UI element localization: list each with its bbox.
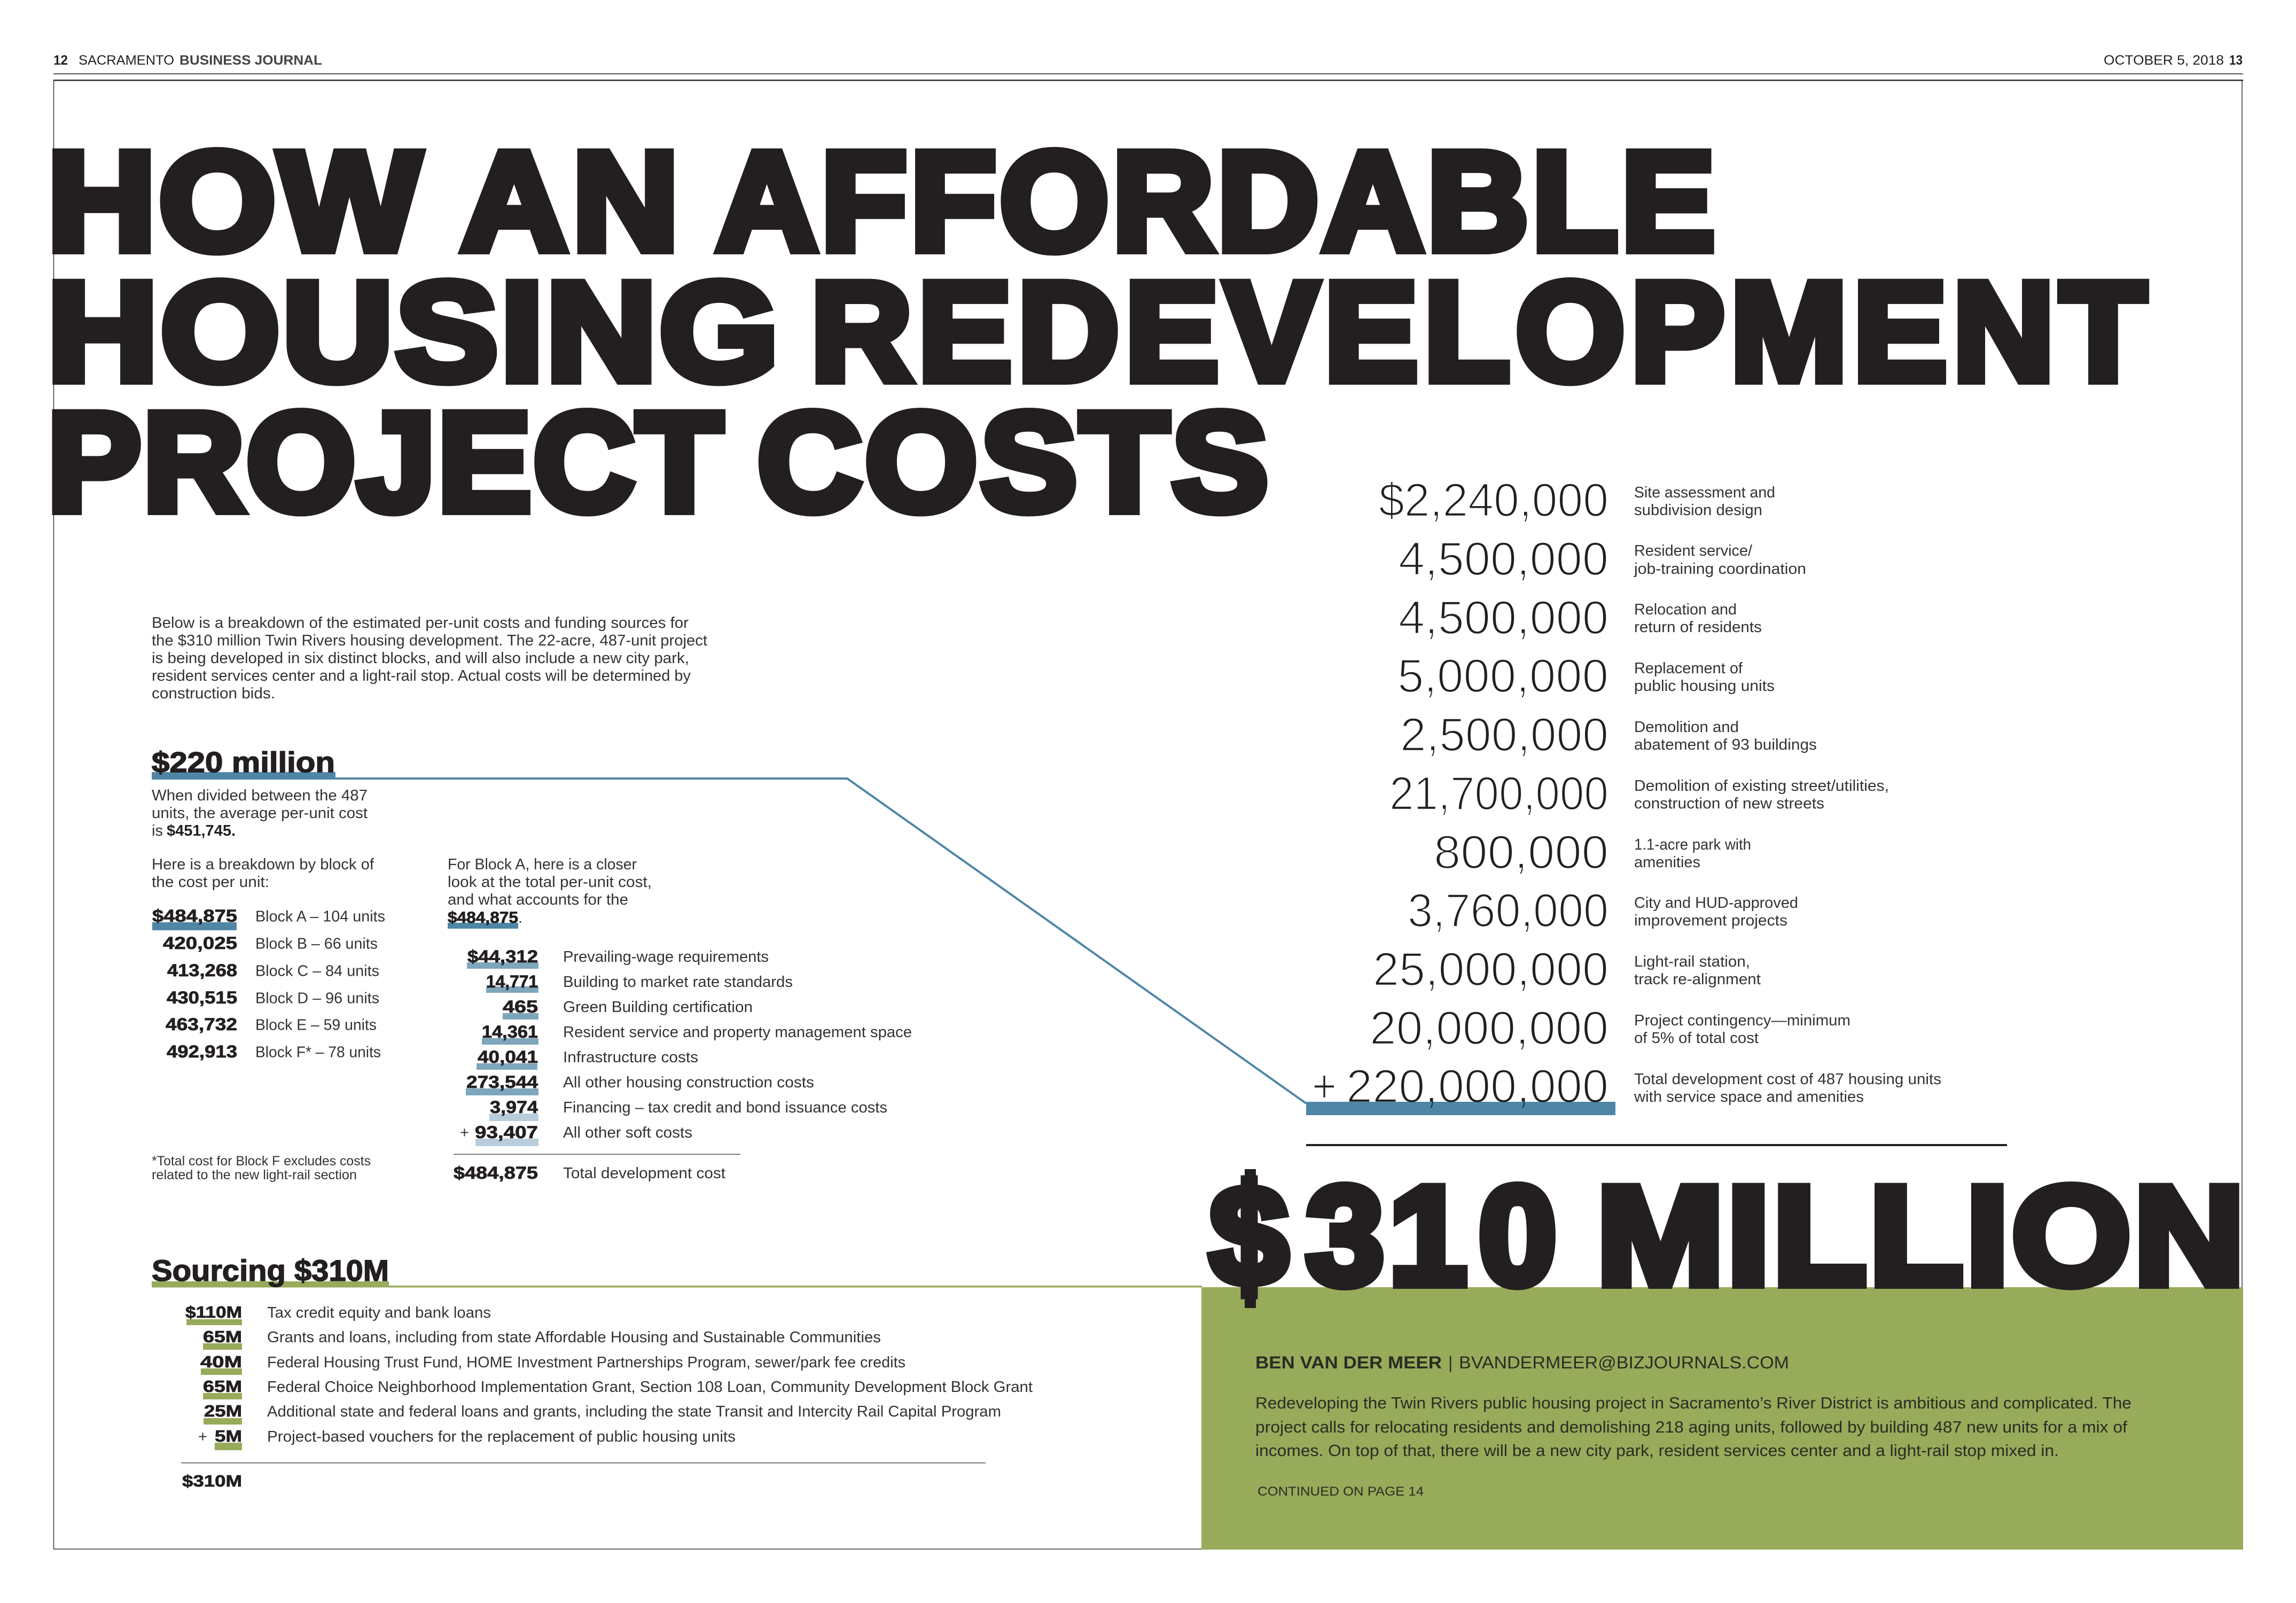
per-unit average text: $451,745.: [167, 822, 236, 839]
cost column labels: public housing units: [1634, 678, 1775, 695]
per-unit average text: units, the average per-unit cost: [152, 805, 368, 822]
title: HOW: [48, 123, 421, 279]
cost column labels: subdivision design: [1634, 502, 1762, 519]
per-unit average text: is: [152, 822, 163, 839]
story text: incomes. On top of that, there will be a new city park, resident services center and a light-rail stop mixed in.: [1255, 1441, 2059, 1460]
cost column labels: with service space and amenities: [1634, 1088, 1864, 1106]
page header: 13: [2229, 53, 2243, 68]
connector line from $220 million to the cost column: [335, 779, 1306, 1103]
cost column labels: Light-rail station,: [1634, 953, 1750, 970]
green panel: [1201, 1287, 2243, 1550]
block cost list: 413,268: [167, 961, 237, 980]
intro text: Below is a breakdown of the estimated per-unit costs and funding sources for: [152, 614, 689, 632]
cost column labels: Replacement of: [1634, 660, 1743, 677]
Block A intro: [448, 856, 652, 929]
heading: Sourcing $310M: Sourcing $310M: [152, 1254, 389, 1287]
funding sources list: $310M: [182, 1472, 242, 1490]
total rule: [1306, 1144, 2007, 1146]
funding sources list: Additional state and federal loans and grants, including the state Transit and Intercity Rail Capital Program: [267, 1403, 1001, 1420]
Block A cost breakdown: +: [460, 1124, 469, 1141]
big total: $310 MILLION: $310: [1210, 1157, 1557, 1314]
block cost list: Block B – 66 units: [255, 935, 378, 952]
per-unit average text: [152, 787, 368, 839]
cost column labels: return of residents: [1634, 619, 1762, 636]
heading: $220 million: $220 million: [152, 746, 335, 779]
continued note: CONTINUED ON PAGE 14: [1258, 1484, 1424, 1499]
Block A cost breakdown: Financing – tax credit and bond issuance costs: [563, 1099, 887, 1116]
Block A cost breakdown: Resident service and property management space: [563, 1024, 912, 1041]
Block A cost breakdown: Green Building certification: [563, 999, 753, 1016]
heading: Sourcing $310M: [152, 1254, 1202, 1288]
story text: Redeveloping the Twin Rivers public housing project in Sacramento’s River District is ambitious and complicated. The: [1255, 1394, 2131, 1412]
cost column labels: improvement projects: [1634, 912, 1787, 929]
intro text: resident services center and a light-rail stop. Actual costs will be determined by: [152, 667, 691, 684]
footnote: *Total cost for Block F excludes costs: [152, 1154, 371, 1169]
Block A cost breakdown: 40,041: [478, 1047, 538, 1067]
intro text: is being developed in six distinct blocks, and will also include a new city park,: [152, 650, 689, 667]
cost column labels: Site assessment and: [1634, 484, 1775, 501]
funding sources list: 40M: [200, 1352, 242, 1371]
funding sources list: [181, 1303, 1033, 1490]
cost column amounts: 20,000,000: [1370, 1001, 1608, 1054]
cost column amounts: 5,000,000: [1397, 649, 1608, 702]
funding sources list: 65M: [203, 1327, 242, 1346]
footnote: related to the new light-rail section: [152, 1168, 357, 1182]
title: AFFORDABLE: [716, 123, 1715, 279]
block cost list: $484,875: [152, 906, 237, 925]
cost column labels: amenities: [1634, 854, 1700, 871]
big total: $310 MILLION: MILLION: [1597, 1158, 2244, 1314]
cost column labels: construction of new streets: [1634, 795, 1824, 812]
page header: SACRAMENTO: [79, 53, 174, 68]
block cost list: Block A – 104 units: [255, 908, 385, 925]
cost column labels: Demolition and: [1634, 719, 1739, 736]
block cost list: 463,732: [166, 1015, 237, 1034]
block cost list: Block F* – 78 units: [255, 1044, 381, 1061]
Block A cost breakdown: 3,974: [490, 1098, 538, 1117]
cost column amounts: 2,500,000: [1400, 708, 1608, 761]
Block A intro: and what accounts for the: [448, 891, 628, 908]
Block A cost breakdown: 93,407: [475, 1123, 538, 1142]
cost column labels: Project contingency—minimum: [1634, 1012, 1850, 1029]
funding sources list: 25M: [204, 1402, 242, 1420]
cost column amounts: 4,500,000: [1399, 532, 1608, 585]
Block A cost breakdown: All other housing construction costs: [563, 1074, 814, 1091]
title: PROJECT: [48, 384, 722, 540]
byline: BEN VAN DER MEER: [1255, 1353, 1442, 1372]
cost column amounts: 4,500,000: [1399, 591, 1608, 644]
cost column labels: job-training coordination: [1634, 561, 1806, 578]
block cost list: 420,025: [163, 933, 237, 953]
cost column amounts: $2,240,000: [1379, 473, 1608, 526]
cost column labels: abatement of 93 buildings: [1634, 736, 1817, 753]
Block A cost breakdown: 14,361: [482, 1022, 538, 1041]
block cost list: [152, 906, 385, 1061]
cost column amounts: [1312, 473, 1608, 1112]
funding sources list: Grants and loans, including from state Affordable Housing and Sustainable Communities: [267, 1329, 881, 1346]
total bar under cost column: [1306, 1102, 1615, 1115]
funding sources list: $110M: [185, 1303, 242, 1321]
page header: BUSINESS JOURNAL: [179, 53, 322, 68]
page header: [53, 53, 2243, 81]
block breakdown intro: [152, 856, 374, 891]
Block A cost breakdown: $44,312: [467, 947, 538, 966]
cost column amounts: 800,000: [1434, 826, 1608, 878]
cost column labels: [1634, 484, 1941, 1106]
cost column labels: track re-alignment: [1634, 971, 1761, 988]
Block A cost breakdown: 465: [503, 997, 538, 1016]
cost column labels: Demolition of existing street/utilities,: [1634, 777, 1889, 795]
title: COSTS: [757, 384, 1268, 540]
title: REDEVELOPMENT: [811, 253, 2146, 410]
page header: 12: [53, 53, 68, 68]
cost column amounts: 25,000,000: [1373, 943, 1608, 995]
Block A cost breakdown: Building to market rate standards: [563, 974, 793, 991]
cost column labels: 1.1-acre park with: [1634, 836, 1751, 853]
Block A intro: For Block A, here is a closer: [448, 856, 637, 873]
block cost list: Block C – 84 units: [255, 963, 379, 980]
funding sources list: 65M: [203, 1377, 242, 1396]
story text: [1255, 1394, 2131, 1460]
funding sources list: Tax credit equity and bank loans: [267, 1304, 491, 1321]
byline: |: [1448, 1353, 1452, 1372]
block cost list: 430,515: [167, 988, 237, 1007]
Block A intro: look at the total per-unit cost,: [448, 874, 652, 891]
cost column amounts: +: [1312, 1060, 1337, 1112]
cost column amounts: 220,000,000: [1346, 1060, 1608, 1112]
intro text: construction bids.: [152, 685, 275, 702]
Block A intro: $484,875: [448, 909, 518, 927]
funding sources list: Project-based vouchers for the replacement of public housing units: [267, 1428, 736, 1445]
block cost list: Block E – 59 units: [255, 1016, 377, 1033]
big total: $310 MILLION: [1210, 1157, 2244, 1314]
funding sources list: Federal Choice Neighborhood Implementation Grant, Section 108 Loan, Community Development Block Grant: [267, 1379, 1033, 1396]
Block A cost breakdown: Prevailing-wage requirements: [563, 948, 769, 966]
intro text: [152, 614, 707, 702]
cost column amounts: 21,700,000: [1389, 767, 1608, 820]
block cost list: 492,913: [167, 1042, 237, 1061]
cost column labels: Total development cost of 487 housing units: [1634, 1071, 1941, 1088]
page header: OCTOBER 5, 2018: [2104, 53, 2224, 68]
funding sources list: Federal Housing Trust Fund, HOME Investment Partnerships Program, sewer/park fee credits: [267, 1354, 905, 1371]
story text: project calls for relocating residents and demolishing 218 aging units, followed by building 487 new units for a mix of: [1255, 1418, 2127, 1436]
Block A intro: .: [518, 909, 522, 927]
intro text: the $310 million Twin Rivers housing development. The 22-acre, 487-unit project: [152, 632, 707, 649]
title: HOUSING: [48, 254, 778, 410]
cost column labels: of 5% of total cost: [1634, 1030, 1759, 1047]
block breakdown intro: the cost per unit:: [152, 874, 269, 891]
Block A cost breakdown: [454, 947, 912, 1182]
cost column labels: Relocation and: [1634, 601, 1737, 618]
Block A cost breakdown: $484,875: [454, 1163, 538, 1182]
title: [48, 123, 2146, 540]
byline: BVANDERMEER@BIZJOURNALS.COM: [1459, 1353, 1789, 1372]
footnote: [152, 1154, 371, 1182]
cost column labels: Resident service/: [1634, 542, 1753, 559]
cost column labels: City and HUD-approved: [1634, 894, 1798, 912]
Block A cost breakdown: 14,771: [486, 972, 538, 991]
per-unit average text: When divided between the 487: [152, 787, 368, 804]
funding sources list: +: [198, 1428, 207, 1445]
title: AN: [461, 123, 678, 279]
cost column amounts: 3,760,000: [1408, 884, 1608, 937]
Block A cost breakdown: Total development cost: [563, 1165, 725, 1182]
Block A cost breakdown: All other soft costs: [563, 1124, 692, 1141]
byline: [1255, 1353, 1789, 1372]
funding sources list: 5M: [215, 1427, 242, 1445]
block breakdown intro: Here is a breakdown by block of: [152, 856, 374, 873]
block cost list: Block D – 96 units: [255, 990, 379, 1007]
Block A cost breakdown: Infrastructure costs: [563, 1049, 698, 1066]
Block A cost breakdown: 273,544: [466, 1072, 538, 1092]
